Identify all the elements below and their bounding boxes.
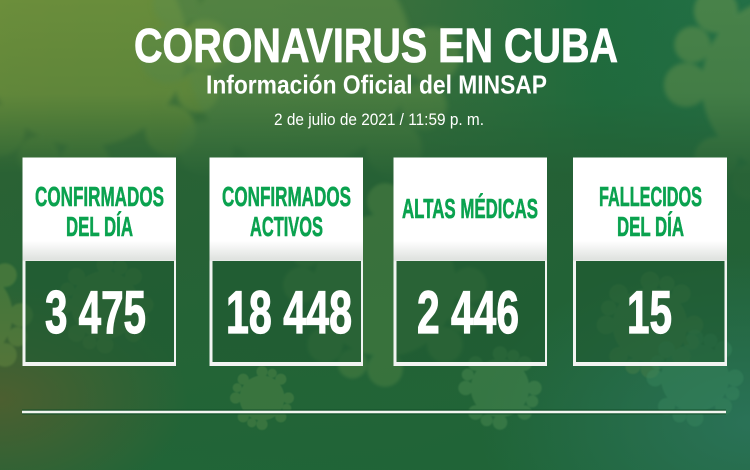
label: DEL DÍA bbox=[617, 211, 684, 242]
value: 18 448 bbox=[226, 279, 352, 346]
virus: left edge bbox=[0, 247, 33, 383]
value: 15 bbox=[627, 279, 672, 346]
card frame bbox=[210, 158, 363, 366]
date and time: 2 de julio de 2021 / 11:59 p. m. bbox=[274, 110, 484, 129]
virus: faint bottom-right bbox=[646, 330, 744, 426]
label: ALTAS MÉDICAS bbox=[402, 193, 538, 224]
footer divider line bbox=[22, 410, 726, 414]
panel: fallecidos del dia bbox=[573, 158, 727, 366]
card frame bbox=[22, 158, 176, 366]
label: CONFIRMADOS bbox=[222, 181, 351, 212]
virus: small bottom-right-centre bbox=[458, 346, 542, 430]
value background bbox=[396, 261, 545, 362]
subtitle: Información Oficial del MINSAP bbox=[206, 70, 547, 100]
value background bbox=[212, 261, 361, 362]
label: CONFIRMADOS bbox=[35, 181, 164, 212]
panel: confirmados del dia bbox=[22, 158, 176, 366]
title: CORONAVIRUS EN CUBA bbox=[134, 20, 618, 73]
virus: mid-left behind panels bbox=[56, 256, 154, 354]
value background bbox=[576, 261, 724, 362]
panel: confirmados activos bbox=[210, 158, 363, 366]
virus: large top-left bbox=[0, 0, 230, 190]
label: ACTIVOS bbox=[250, 211, 323, 242]
panel: altas medicas bbox=[394, 158, 547, 366]
virus: large top-centre bbox=[140, 0, 460, 215]
virus: right edge bbox=[664, 0, 750, 211]
value: 2 446 bbox=[417, 279, 519, 346]
value background bbox=[26, 261, 174, 362]
virus: small bottom-centre bbox=[230, 366, 294, 430]
card frame bbox=[573, 158, 727, 366]
card frame bbox=[394, 158, 547, 366]
virus: mid-centre behind panels bbox=[283, 183, 487, 387]
label: DEL DÍA bbox=[66, 211, 133, 242]
virus: right behind panels bbox=[597, 272, 703, 378]
value: 3 475 bbox=[45, 279, 146, 346]
